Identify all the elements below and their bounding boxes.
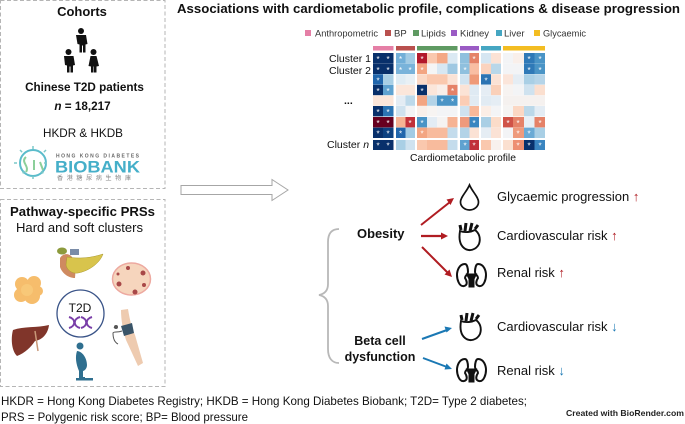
cohort description: Chinese T2D patients (25, 81, 144, 94)
significance stars: * (527, 130, 531, 138)
panel: cohorts (0, 0, 165, 188)
significance stars: * (516, 119, 520, 128)
bracket (319, 229, 339, 363)
significance stars: * (376, 76, 380, 86)
icon: pancreas (57, 248, 103, 278)
outcome: cardiovascular risk up: Cardiovascular risk ↑ (497, 228, 618, 243)
PRS heading: Pathway-specific PRSs (10, 205, 155, 219)
cluster row n (373, 140, 545, 150)
icon: heart (obesity) (459, 223, 480, 250)
icon: adipose cells (14, 276, 43, 304)
significance stars: * (376, 119, 380, 128)
footnote: abbreviations: HKDR = Hong Kong Diabetes Registry; HKDB = Hong Kong Diabetes Biobank; T2D= Type 2 diabetes; (1, 394, 527, 408)
arrows: obesity effects (421, 198, 454, 277)
logo: Hong Kong Diabetes Biobank: HONG KONG DIABETES (56, 154, 140, 160)
significance stars: * (386, 108, 390, 117)
significance stars: * (538, 119, 542, 128)
significance stars: * (386, 87, 390, 96)
significance stars: * (399, 55, 402, 64)
arrows: beta cell effects (422, 326, 452, 370)
legend: Kidney (460, 28, 489, 40)
significance stars: * (451, 87, 454, 96)
icon: T2D DNA circle (57, 290, 104, 337)
sample size: n = 18,217 (54, 100, 111, 113)
credit: Created with BioRender.com (566, 408, 684, 418)
label: beta cell dysfunction: dysfunction (345, 350, 415, 364)
icon: liver (12, 325, 49, 356)
label: beta cell dysfunction: Beta cell (354, 334, 406, 348)
registry names: HKDR & HKDB (43, 127, 123, 140)
significance stars: * (408, 119, 412, 128)
significance stars: * (408, 66, 412, 75)
logo: Hong Kong Diabetes Biobank: BIOBANK (55, 158, 141, 176)
significance stars: * (386, 55, 390, 64)
heatmap: cardiometabolic profile (373, 46, 545, 150)
PRS subheading: Hard and soft clusters (16, 221, 143, 235)
significance stars: * (440, 98, 444, 106)
significance stars: * (376, 66, 380, 75)
significance stars: * (399, 130, 402, 138)
icon: T2D DNA circle: T2D (69, 301, 92, 315)
legend: Anthropometric (315, 28, 378, 40)
legend: BP (394, 28, 407, 40)
outcome: cardiovascular risk down: Cardiovascular risk ↓ (497, 319, 618, 334)
footnote: abbreviations (1, 394, 527, 424)
icon: heart (beta cell) (460, 313, 481, 340)
significance stars: * (420, 66, 424, 75)
significance stars: * (472, 55, 476, 64)
significance stars: * (376, 87, 380, 96)
significance stars (376, 55, 542, 150)
logo: Hong Kong Diabetes Biobank: 香港糖尿病生物庫 (57, 174, 131, 182)
outcome: renal risk up: Renal risk ↑ (497, 265, 565, 280)
cluster labels: Cluster 2 (329, 65, 371, 77)
arrow: hollow connector (181, 180, 288, 200)
footnote: abbreviations: PRS = Polygenic risk score; BP= Blood pressure (1, 410, 248, 424)
significance stars: * (484, 76, 488, 86)
significance stars: * (472, 119, 476, 128)
cluster labels: ... (344, 95, 353, 107)
title: Associations with cardiometabolic profile, complications & disease progression (177, 2, 680, 16)
icon: islet cell (112, 263, 150, 295)
significance stars: * (386, 130, 390, 138)
logo: Hong Kong Diabetes Biobank (14, 146, 141, 182)
cohorts heading: Cohorts (57, 4, 107, 19)
significance stars: * (527, 66, 531, 75)
icon: kidneys (beta cell) (457, 359, 486, 382)
significance stars: * (420, 130, 424, 138)
cluster labels: Cluster 1 (329, 53, 371, 65)
significance stars: * (420, 55, 424, 64)
cluster labels (327, 53, 371, 151)
significance stars: * (538, 142, 542, 150)
significance stars: * (420, 119, 424, 128)
icon: blood pressure arm (113, 309, 143, 366)
legend: Liver (504, 28, 525, 40)
significance stars: * (527, 142, 531, 150)
significance stars: * (516, 142, 520, 150)
significance stars: * (376, 55, 380, 64)
significance stars: * (376, 108, 380, 117)
significance stars: * (420, 87, 424, 96)
outcome: glycaemic progression up: Glycaemic progression ↑ (497, 189, 639, 204)
cluster row 4 (373, 85, 545, 95)
significance stars: * (463, 142, 467, 150)
significance stars: * (399, 66, 402, 75)
outcome: renal risk down: Renal risk ↓ (497, 363, 565, 378)
significance stars: * (451, 98, 454, 106)
icon: person on scale (76, 342, 93, 380)
significance stars: * (386, 66, 390, 75)
cluster row 8 (373, 128, 545, 138)
significance stars: * (538, 66, 542, 75)
icon: three people (64, 28, 99, 72)
significance stars: * (386, 119, 390, 128)
significance stars: * (506, 119, 510, 128)
significance stars: * (376, 142, 380, 150)
icon: glucose drop (460, 185, 478, 210)
significance stars: * (516, 130, 520, 138)
cluster row 7 (373, 117, 545, 127)
panel: pathway-specific PRSs (0, 200, 165, 386)
icon: kidneys (obesity) (457, 264, 486, 287)
cluster row 1 (373, 53, 545, 63)
cluster row 2 (373, 64, 545, 74)
significance stars: * (463, 66, 467, 75)
heatmap axis label: Cardiometabolic profile (410, 152, 516, 164)
significance stars: * (538, 55, 542, 64)
significance stars: * (376, 130, 380, 138)
cluster row 5 (373, 95, 545, 106)
significance stars: * (527, 55, 531, 64)
legend: Lipids (421, 28, 446, 40)
cluster labels: Cluster n (327, 139, 369, 151)
significance stars: * (472, 142, 476, 150)
heatmap category bars (373, 46, 545, 50)
legend (305, 28, 586, 40)
legend: Glycaemic (543, 28, 586, 40)
cluster row 3 (373, 74, 545, 85)
significance stars: * (386, 142, 390, 150)
label: obesity: Obesity (357, 226, 405, 241)
cluster row 6 (373, 106, 545, 116)
